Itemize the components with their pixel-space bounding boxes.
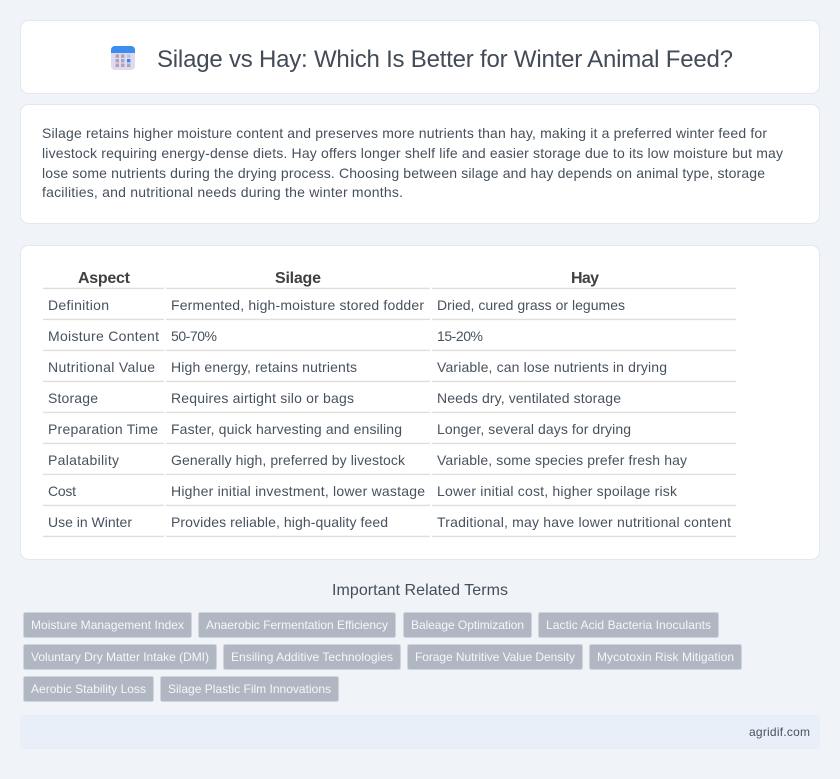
row: preparation time: Preparation Time bbox=[48, 421, 158, 437]
chip bbox=[198, 612, 396, 638]
row: preparation time: Faster, quick harvesting and ensiling bbox=[171, 421, 402, 437]
row: cost: Cost bbox=[48, 483, 76, 499]
chip: Aerobic Stability Loss bbox=[31, 682, 146, 696]
row: nutritional value: High energy, retains nutrients bbox=[171, 359, 357, 375]
chip bbox=[408, 644, 582, 670]
row: nutritional value bbox=[48, 359, 667, 375]
table header bbox=[78, 270, 599, 287]
chip: Baleage Optimization bbox=[411, 618, 524, 632]
chip: Ensiling Additive Technologies bbox=[231, 650, 393, 664]
row: use in winter: Provides reliable, high-quality feed bbox=[171, 514, 388, 530]
chip bbox=[590, 644, 742, 670]
row: storage: Storage bbox=[48, 390, 98, 406]
row: definition: Fermented, high-moisture stored fodder bbox=[171, 297, 424, 313]
row: use in winter bbox=[48, 514, 731, 530]
chip bbox=[24, 644, 216, 670]
panel: comparison table bbox=[20, 246, 820, 560]
heading: related terms: Important Related Terms bbox=[332, 582, 508, 599]
chip: Silage Plastic Film Innovations bbox=[168, 682, 331, 696]
row: palatability: Variable, some species prefer fresh hay bbox=[437, 452, 687, 468]
text block: introduction: facilities, and nutritional needs during the winter months. bbox=[42, 184, 403, 200]
text block: introduction: Silage retains higher moisture content and preserves more nutrients than hay, making it a preferred winter feed for bbox=[42, 125, 767, 141]
chip bbox=[404, 612, 532, 638]
title: Silage vs Hay: Which Is Better for Winter Animal Feed? bbox=[157, 46, 733, 73]
row: use in winter: Traditional, may have lower nutritional content bbox=[437, 514, 731, 530]
chip: Moisture Management Index bbox=[31, 618, 184, 632]
row: palatability bbox=[48, 452, 687, 468]
table header: Silage bbox=[275, 270, 321, 287]
panel: introduction bbox=[20, 104, 820, 224]
row: moisture content: Moisture Content bbox=[48, 328, 159, 344]
chip: Mycotoxin Risk Mitigation bbox=[597, 650, 734, 664]
row: preparation time: Longer, several days for drying bbox=[437, 421, 631, 437]
text block: introduction: livestock requiring energy-dense diets. Hay offers longer shelf life and easier storage due to its low moisture but may bbox=[42, 145, 783, 161]
related terms chips bbox=[24, 612, 742, 702]
chip bbox=[224, 644, 400, 670]
chip bbox=[538, 612, 718, 638]
row: palatability: Generally high, preferred by livestock bbox=[171, 452, 406, 468]
chip: Voluntary Dry Matter Intake (DMI) bbox=[31, 650, 209, 664]
chip bbox=[160, 676, 338, 702]
chip: Forage Nutritive Value Density bbox=[415, 650, 575, 664]
row: moisture content bbox=[48, 328, 483, 344]
chip bbox=[24, 676, 154, 702]
row: storage: Needs dry, ventilated storage bbox=[437, 390, 621, 406]
chip bbox=[24, 612, 192, 638]
row: cost: Higher initial investment, lower wastage bbox=[171, 483, 425, 499]
row: cost: Lower initial cost, higher spoilage risk bbox=[437, 483, 678, 499]
row: palatability: Palatability bbox=[48, 452, 119, 468]
footer bar bbox=[20, 715, 820, 749]
row: preparation time bbox=[48, 421, 631, 437]
row: moisture content: 15-20% bbox=[437, 328, 483, 344]
row: storage: Requires airtight silo or bags bbox=[171, 390, 354, 406]
row: nutritional value: Variable, can lose nutrients in drying bbox=[437, 359, 667, 375]
text block: introduction: lose some nutrients during the drying process. Choosing between silage and hay depends on animal type, storage bbox=[42, 165, 765, 181]
chip: Anaerobic Fermentation Efficiency bbox=[206, 618, 388, 632]
table header: Aspect bbox=[78, 270, 131, 287]
row: moisture content: 50-70% bbox=[171, 328, 217, 344]
row: definition: Dried, cured grass or legumes bbox=[437, 297, 625, 313]
chip: Lactic Acid Bacteria Inoculants bbox=[546, 618, 711, 632]
text block: introduction bbox=[42, 125, 783, 200]
icon: calendar bbox=[111, 46, 135, 70]
row: nutritional value: Nutritional Value bbox=[48, 359, 155, 375]
row: use in winter: Use in Winter bbox=[48, 514, 132, 530]
row: definition: Definition bbox=[48, 297, 109, 313]
table grid lines bbox=[43, 288, 736, 536]
panel: title header bbox=[20, 20, 820, 94]
footer: source: agridif.com bbox=[749, 725, 810, 739]
table header: Hay bbox=[571, 270, 599, 287]
row: definition bbox=[48, 297, 625, 313]
row: storage bbox=[48, 390, 621, 406]
row: cost bbox=[48, 483, 678, 499]
